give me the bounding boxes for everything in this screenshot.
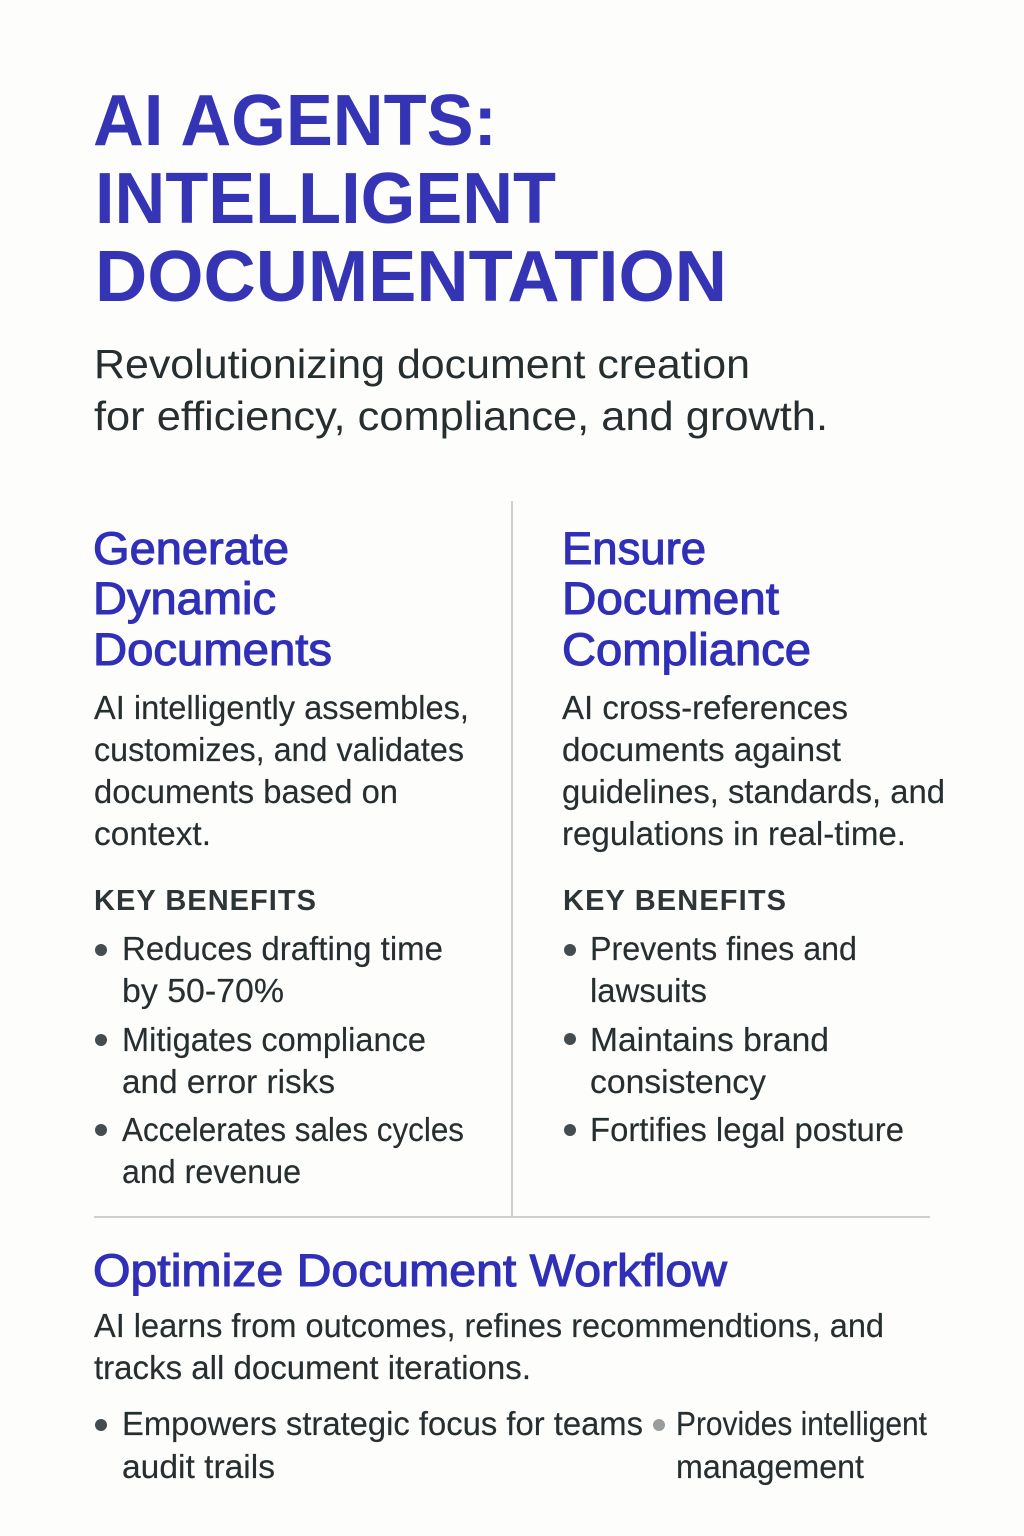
heading: ensure document compliance: [562, 523, 811, 675]
panel: optimize document workflow: [93, 1245, 927, 1485]
description: generate: context.: [94, 815, 211, 852]
heading: optimize document workflow: Optimize Document Workflow: [93, 1245, 728, 1296]
benefits list: optimize left: Empowers strategic focus for teams: [122, 1405, 643, 1442]
benefits list: ensure: Fortifies legal posture: [590, 1111, 904, 1148]
benefits list: optimize right: management: [676, 1448, 864, 1485]
description: optimize: [94, 1307, 884, 1386]
heading: ensure document compliance: Ensure: [562, 523, 706, 574]
title: DOCUMENTATION: [95, 237, 727, 317]
description: generate: customizes, and validates: [94, 731, 464, 768]
heading: ensure document compliance: Compliance: [562, 624, 811, 675]
description: ensure: [562, 689, 945, 852]
heading: generate dynamic documents: Documents: [93, 624, 332, 675]
benefits list: ensure: [564, 930, 904, 1148]
benefits list: optimize right: Provides intelligent: [676, 1405, 927, 1442]
heading: generate dynamic documents: Generate: [93, 523, 289, 574]
subtitle: Revolutionizing document creation: [94, 341, 750, 387]
description: generate: [94, 689, 469, 852]
benefits list: generate: Accelerates sales cycles: [122, 1111, 464, 1148]
benefits list: generate: and revenue: [122, 1153, 301, 1190]
title: AI AGENTS:: [93, 81, 497, 161]
description: ensure: regulations in real-time.: [562, 815, 906, 852]
subheading: key benefits: KEY BENEFITS: [94, 885, 316, 917]
title: [93, 81, 727, 317]
benefits list: optimize left: audit trails: [122, 1448, 275, 1485]
panel: generate dynamic documents: [93, 523, 469, 1190]
description: optimize: tracks all document iterations.: [94, 1349, 531, 1386]
benefits list: ensure: Prevents fines and: [590, 930, 857, 967]
subtitle: for efficiency, compliance, and growth.: [94, 393, 828, 439]
benefits list: generate: Reduces drafting time: [122, 930, 443, 967]
heading: ensure document compliance: Document: [562, 573, 780, 624]
description: generate: documents based on: [94, 773, 398, 810]
heading: generate dynamic documents: Dynamic: [93, 573, 276, 624]
benefits list: ensure: lawsuits: [590, 972, 707, 1009]
panel: ensure document compliance: [562, 523, 945, 1148]
subheading: key benefits: KEY BENEFITS: [563, 885, 786, 917]
description: ensure: documents against: [562, 731, 841, 768]
title: INTELLIGENT: [95, 159, 556, 239]
benefits list: ensure: Maintains brand: [590, 1021, 829, 1058]
benefits list: generate: Mitigates compliance: [122, 1021, 426, 1058]
description: optimize: AI learns from outcomes, refines recommendtions, and: [94, 1307, 884, 1344]
benefits list: optimize left: [95, 1405, 643, 1485]
benefits list: generate: and error risks: [122, 1063, 335, 1100]
subtitle: [94, 341, 828, 439]
benefits list: generate: by 50-70%: [122, 972, 284, 1009]
description: ensure: guidelines, standards, and: [562, 773, 945, 810]
benefits list: ensure: consistency: [590, 1063, 767, 1100]
benefits list: optimize right: [653, 1405, 927, 1485]
heading: generate dynamic documents: [93, 523, 332, 675]
description: ensure: AI cross-references: [562, 689, 848, 726]
description: generate: AI intelligently assembles,: [94, 689, 469, 726]
benefits list: generate: [95, 930, 464, 1190]
